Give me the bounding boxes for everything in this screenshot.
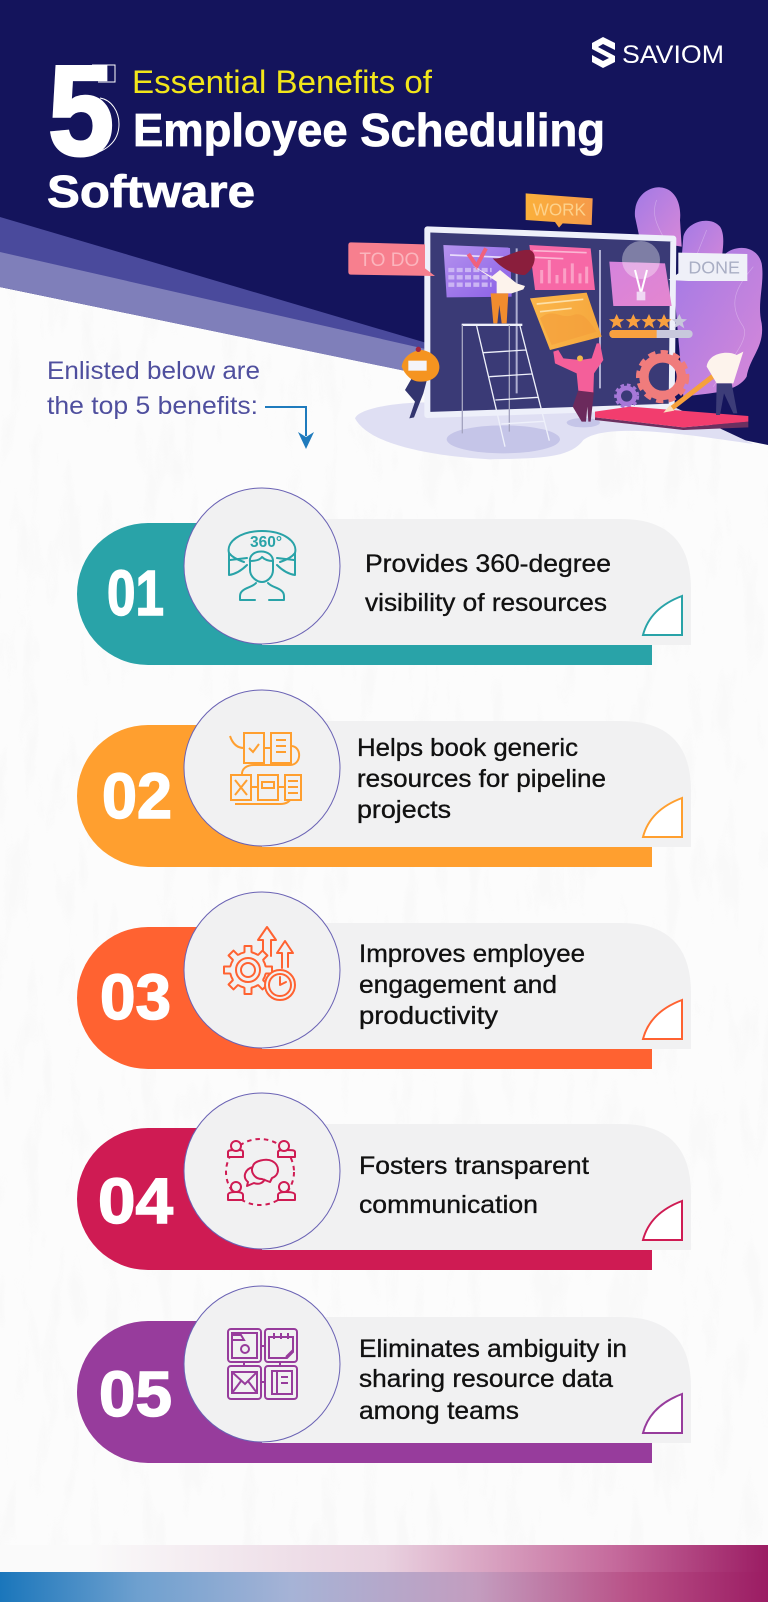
title	[47, 40, 605, 217]
ground shadow	[355, 403, 753, 459]
colored band	[77, 523, 652, 665]
task board	[427, 229, 673, 415]
icon circle	[184, 1286, 340, 1442]
tag: to do: TO DO	[359, 250, 419, 271]
colored band	[77, 1321, 652, 1463]
icon circle	[184, 892, 340, 1048]
icon: gear, arrows and clock	[224, 927, 295, 1000]
progress bar	[609, 330, 693, 338]
text: Eliminates ambiguity in	[359, 1335, 627, 1363]
grey card	[262, 519, 691, 645]
icon circle	[184, 690, 340, 846]
text: Fosters transparent	[359, 1152, 589, 1180]
icon: 360 degree person: 360°	[250, 534, 282, 551]
tag: done	[668, 253, 747, 281]
text: Helps book generic	[357, 734, 578, 762]
grey card	[262, 923, 691, 1049]
intro text	[47, 357, 260, 420]
purple calendar note	[443, 245, 512, 297]
tag: to do	[348, 242, 435, 276]
tag: work	[526, 193, 593, 228]
panel: benefit 04	[77, 1093, 691, 1270]
text: resources for pipeline	[357, 765, 606, 793]
yellow note	[530, 293, 602, 350]
panel: benefit 02	[77, 690, 691, 867]
text: Improves employee	[359, 940, 585, 968]
text: visibility of resources	[365, 589, 607, 617]
icon: resource booking flow	[230, 733, 301, 804]
icon: 360 degree person	[229, 531, 295, 600]
colored band	[77, 927, 652, 1069]
header background	[0, 0, 768, 445]
pink chart note	[529, 245, 595, 290]
panel: benefit 01	[77, 488, 691, 665]
icon circle	[184, 1093, 340, 1249]
footer gradient bars	[0, 1545, 768, 1602]
ladder	[462, 324, 549, 447]
logo: Saviom	[592, 37, 724, 69]
corner accent	[643, 1201, 682, 1240]
title line: Software: Software	[47, 166, 255, 217]
illustration: team at task board	[348, 187, 762, 459]
colored band	[77, 1128, 652, 1270]
icon: people communicating	[226, 1139, 295, 1205]
title line: Employee Scheduling: Employee Scheduling	[133, 104, 605, 156]
icon circle	[184, 488, 340, 644]
grey card	[262, 1317, 691, 1443]
number: 02	[102, 760, 172, 832]
intro text: the top 5 benefits:	[47, 392, 258, 420]
text: projects	[357, 796, 451, 824]
number: 04	[98, 1165, 173, 1237]
grey card	[262, 721, 691, 847]
notebook	[595, 407, 748, 430]
plants	[635, 187, 762, 397]
man lifting note	[553, 343, 603, 422]
text: communication	[359, 1191, 538, 1219]
rating stars	[609, 314, 687, 328]
text: among teams	[359, 1397, 519, 1425]
logo: Saviom: SAVIOM	[622, 41, 724, 69]
text: engagement and	[359, 971, 557, 999]
tag: done: DONE	[688, 257, 740, 277]
number: 03	[100, 961, 171, 1033]
panel: benefit 03	[77, 892, 691, 1069]
title line: Essential Benefits of: Essential Benefits of	[132, 64, 432, 100]
corner accent	[643, 1000, 682, 1039]
grey card	[262, 1124, 691, 1250]
light bulb note	[609, 241, 672, 306]
text: Provides 360-degree	[365, 550, 611, 578]
corner accent	[643, 1394, 682, 1433]
person with tablet	[402, 347, 439, 418]
big numeral five: 5	[48, 40, 114, 183]
text	[359, 1335, 627, 1425]
text	[365, 550, 611, 617]
corner accent	[643, 596, 682, 635]
text: productivity	[359, 1002, 499, 1030]
arrow	[265, 407, 314, 449]
intro text: Enlisted below are	[47, 357, 260, 385]
pencil	[663, 362, 732, 413]
text: sharing resource data	[359, 1365, 613, 1393]
colored band	[77, 725, 652, 867]
tag: work: WORK	[533, 200, 586, 220]
number: 01	[107, 557, 164, 629]
corner accent	[643, 798, 682, 837]
person with pencil	[707, 352, 743, 415]
gears	[615, 352, 687, 407]
text	[359, 1152, 589, 1219]
woman on ladder	[472, 250, 535, 323]
number: 05	[99, 1358, 172, 1430]
text	[359, 940, 585, 1030]
text	[357, 734, 606, 824]
panel: benefit 05	[77, 1286, 691, 1463]
icon: four data tiles	[228, 1329, 297, 1399]
